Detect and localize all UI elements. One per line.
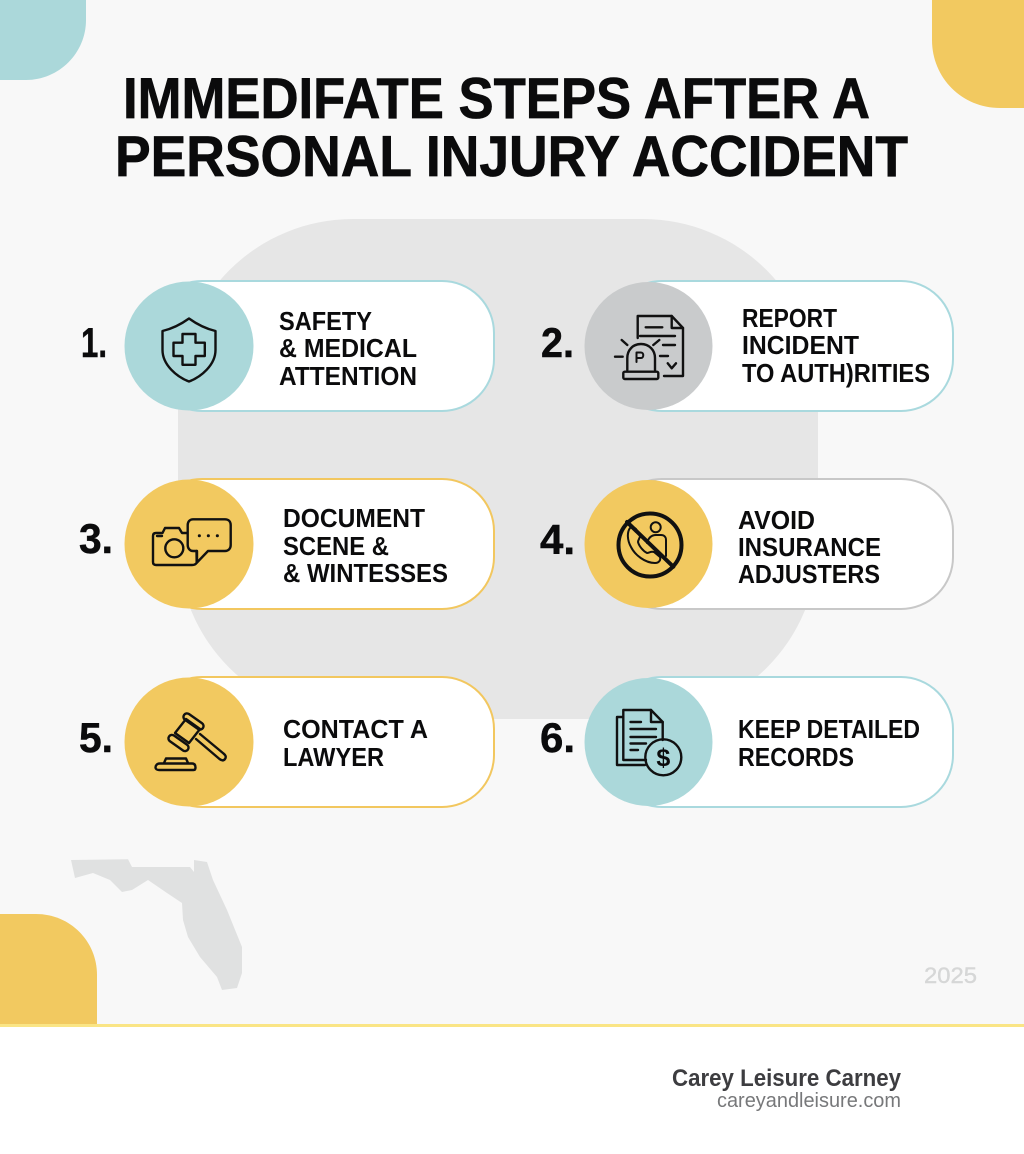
icon: shield with cross <box>162 318 216 382</box>
step 6: KEEP DETAILED <box>738 716 920 744</box>
step 2: 2. <box>541 319 574 366</box>
background rounded square <box>178 219 818 719</box>
step 2: INCIDENT <box>742 332 859 360</box>
title: IMMEDIFATE STEPS AFTER A <box>123 67 870 131</box>
footer band <box>0 1027 1024 1154</box>
step 2: TO AUTH)RITIES <box>742 360 930 388</box>
step 1: 1. <box>81 319 107 366</box>
icon: documents with dollar coin <box>617 710 681 775</box>
title <box>115 67 908 189</box>
footer brand text: careyandleisure.com <box>717 1090 901 1112</box>
step 3 <box>79 479 494 609</box>
footer brand text <box>672 1065 902 1112</box>
step 3: SCENE & <box>283 533 389 561</box>
icon: gavel <box>156 712 226 770</box>
step 3: & WINTESSES <box>283 560 448 588</box>
step 4: 4. <box>540 516 575 563</box>
step 1: SAFETY <box>279 308 372 336</box>
step 3: 3. <box>79 515 113 562</box>
step 4 <box>540 479 953 609</box>
title: PERSONAL INJURY ACCIDENT <box>115 125 908 189</box>
corner shape: bottom left yellow <box>0 914 97 1024</box>
icon: prohibited phone call with adjuster <box>618 514 682 576</box>
step 6 <box>540 677 953 807</box>
footer brand text: Carey Leisure Carney <box>672 1065 902 1092</box>
step 1 <box>81 281 494 411</box>
step 5: 5. <box>79 714 113 761</box>
watermark: Florida map <box>71 859 242 990</box>
year label: 2025 <box>924 963 977 988</box>
step 6: $ <box>656 744 670 772</box>
step 6: RECORDS <box>738 744 854 772</box>
step 6: 6. <box>540 714 575 761</box>
step 1: & MEDICAL <box>279 335 417 363</box>
corner shape: top left teal <box>0 0 86 80</box>
step 4: INSURANCE <box>738 534 881 562</box>
step 5: CONTACT A <box>283 716 428 744</box>
step 5 <box>79 677 494 807</box>
icon: siren and report document <box>615 316 683 379</box>
step 1: ATTENTION <box>279 363 417 391</box>
step 3: DOCUMENT <box>283 505 425 533</box>
step 5: LAWYER <box>283 744 384 772</box>
step 4: ADJUSTERS <box>738 561 880 589</box>
corner shape: top right yellow <box>932 0 1024 108</box>
icon: camera and speech bubble <box>153 519 231 565</box>
footer rule <box>0 1024 1024 1027</box>
step 4: AVOID <box>738 507 815 535</box>
step 2: REPORT <box>742 305 837 333</box>
step 2 <box>541 281 953 411</box>
